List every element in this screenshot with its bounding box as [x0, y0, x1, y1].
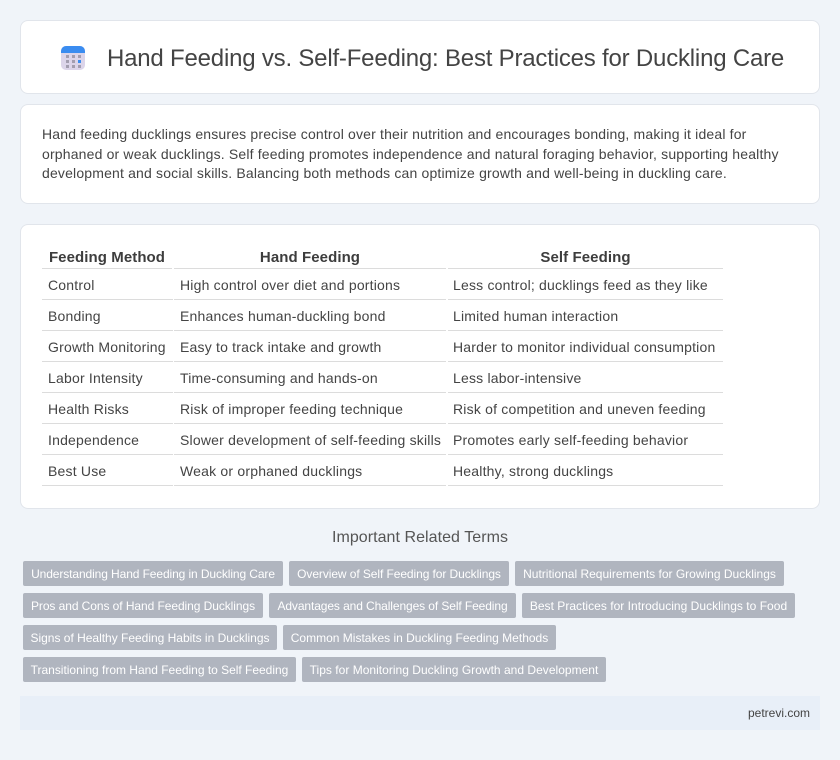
comparison table: Risk of improper feeding technique	[180, 401, 403, 417]
text block: intro	[42, 126, 779, 181]
tag list: related terms: Signs of Healthy Feeding Habits in Ducklings	[30, 631, 270, 645]
comparison table: Health Risks	[48, 401, 129, 417]
panel: title header	[20, 20, 820, 94]
tag list: related terms: Best Practices for Introducing Ducklings to Food	[530, 599, 787, 613]
tag list: related terms	[23, 561, 795, 682]
tag list: related terms: Overview of Self Feeding for Ducklings	[297, 567, 501, 581]
comparison table: Control	[48, 277, 95, 293]
comparison table: Limited human interaction	[453, 308, 618, 324]
tag list: related terms: Transitioning from Hand Feeding to Self Feeding	[31, 663, 288, 677]
heading: related terms: Important Related Terms	[332, 529, 508, 546]
tag list: related terms: Nutritional Requirements for Growing Ducklings	[523, 567, 776, 581]
comparison table: Less labor-intensive	[453, 370, 582, 386]
comparison table: Bonding	[48, 308, 101, 324]
text block: intro: orphaned or weak ducklings. Self feeding promotes independence and natural foraging behavior, supporting healthy	[42, 146, 779, 162]
tag list: related terms: Tips for Monitoring Duckling Growth and Development	[310, 663, 598, 677]
comparison table: Best Use	[48, 463, 106, 479]
panel: comparison table card	[20, 224, 820, 509]
comparison table: Self Feeding	[540, 249, 631, 266]
icon: calendar grid	[61, 46, 85, 70]
comparison table: Independence	[48, 432, 139, 448]
tag list: related terms: Pros and Cons of Hand Feeding Ducklings	[31, 599, 255, 613]
comparison table: Less control; ducklings feed as they like	[453, 277, 708, 293]
comparison table: Harder to monitor individual consumption	[453, 339, 715, 355]
comparison table: High control over diet and portions	[180, 277, 400, 293]
tag list: related terms: Common Mistakes in Duckling Feeding Methods	[291, 631, 548, 645]
comparison table: Time-consuming and hands-on	[180, 370, 378, 386]
panel: intro text	[20, 104, 820, 204]
title: Hand Feeding vs. Self-Feeding: Best Practices for Duckling Care	[107, 45, 784, 72]
comparison table: Healthy, strong ducklings	[453, 463, 613, 479]
text block: intro: development and social skills. Balancing both methods can optimize growth and well-being in duckling care.	[42, 165, 727, 181]
comparison table: Slower development of self-feeding skills	[180, 432, 441, 448]
comparison table: Labor Intensity	[48, 370, 143, 386]
comparison table: Hand Feeding	[260, 249, 360, 266]
comparison table: Growth Monitoring	[48, 339, 166, 355]
comparison table: Feeding Method	[49, 249, 165, 266]
tag list: related terms: Understanding Hand Feeding in Duckling Care	[31, 567, 275, 581]
comparison table	[42, 249, 723, 486]
comparison table: Weak or orphaned ducklings	[180, 463, 362, 479]
tag list: related terms: Advantages and Challenges of Self Feeding	[277, 599, 508, 613]
text block: intro: Hand feeding ducklings ensures precise control over their nutrition and encourages bonding, making it ideal for	[42, 126, 747, 142]
footer band	[20, 696, 820, 730]
comparison table: Risk of competition and uneven feeding	[453, 401, 706, 417]
comparison table: Enhances human-duckling bond	[180, 308, 386, 324]
footer credit: petrevi.com	[748, 706, 810, 720]
comparison table: Easy to track intake and growth	[180, 339, 382, 355]
comparison table: Promotes early self-feeding behavior	[453, 432, 688, 448]
